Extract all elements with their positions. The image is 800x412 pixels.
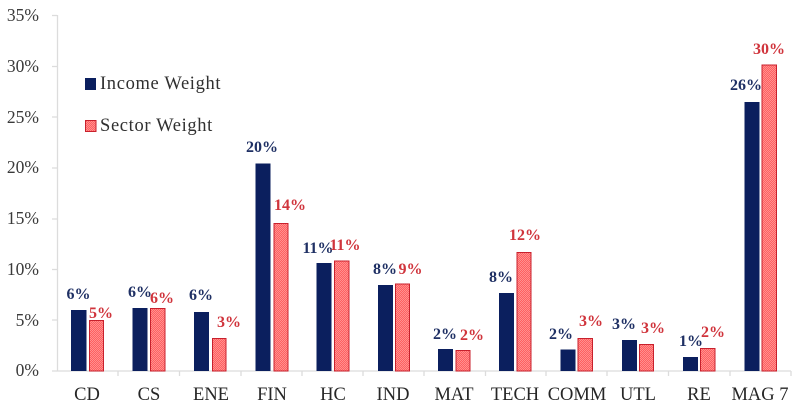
sector weight value labels: 2% <box>701 324 725 341</box>
category labels: MAT <box>434 385 474 405</box>
sector weight value labels: 9% <box>398 261 422 278</box>
sector weight value labels: 6% <box>150 290 174 307</box>
income weight value labels <box>66 77 762 350</box>
sector weight value labels <box>89 41 785 344</box>
category labels: FIN <box>257 385 287 405</box>
income weight value labels: 2% <box>549 326 573 343</box>
sector weight value labels: 3% <box>579 313 603 330</box>
income weight value labels: 11% <box>302 240 334 257</box>
sector weight value labels: 14% <box>274 197 306 214</box>
y axis labels: 30% <box>7 56 39 76</box>
y axis labels: 15% <box>7 208 39 228</box>
category labels: RE <box>687 385 711 405</box>
sector weight value labels: 30% <box>753 41 785 58</box>
sector weight bars <box>90 65 776 371</box>
income weight bars <box>71 102 760 371</box>
sector weight value labels: 5% <box>89 305 113 322</box>
category labels: CS <box>138 385 160 405</box>
income weight value labels: 20% <box>246 139 278 156</box>
category labels: MAG 7 <box>731 385 789 405</box>
category labels: TECH <box>491 385 539 405</box>
legend item: sector weight: Sector Weight <box>100 116 213 136</box>
legend item: income weight: Income Weight <box>100 74 221 94</box>
category labels: COMM <box>548 385 606 405</box>
income weight value labels: 1% <box>679 333 703 350</box>
y axis labels: 0% <box>16 360 39 380</box>
sector weight value labels: 2% <box>460 327 484 344</box>
y axis labels: 5% <box>16 310 39 330</box>
y axis labels: 10% <box>7 259 39 279</box>
income weight value labels: 6% <box>128 284 152 301</box>
income weight value labels: 6% <box>66 286 90 303</box>
income weight value labels: 8% <box>373 261 397 278</box>
sector weight value labels: 3% <box>217 314 241 331</box>
income weight value labels: 3% <box>612 316 636 333</box>
sector weight value labels: 3% <box>641 320 665 337</box>
y axis labels: 25% <box>7 107 39 127</box>
income weight value labels: 6% <box>189 287 213 304</box>
y axis labels <box>7 5 39 380</box>
y axis labels: 20% <box>7 157 39 177</box>
sector weight value labels: 11% <box>329 237 361 254</box>
y axis labels: 35% <box>7 5 39 25</box>
income weight value labels: 8% <box>489 269 513 286</box>
sector weight value labels: 12% <box>509 227 541 244</box>
legend <box>85 74 221 136</box>
category labels: CD <box>74 385 100 405</box>
income weight value labels: 26% <box>730 77 762 94</box>
category labels <box>74 385 789 405</box>
category labels: HC <box>320 385 346 405</box>
income weight value labels: 2% <box>433 326 457 343</box>
category labels: IND <box>377 385 409 405</box>
category labels: ENE <box>193 385 229 405</box>
category labels: UTL <box>620 385 656 405</box>
